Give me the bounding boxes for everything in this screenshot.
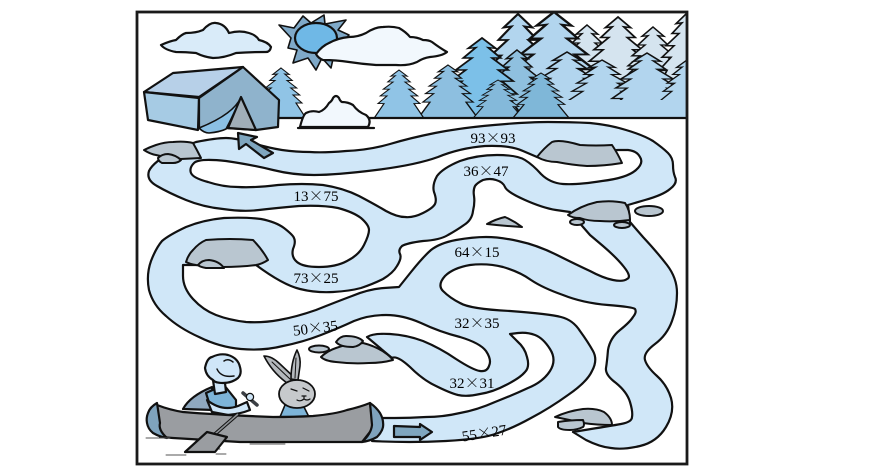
rock: left river bend (186, 239, 268, 268)
front row of darker trees (256, 38, 569, 118)
label: 73x25: 73×25 (293, 267, 339, 288)
frame (137, 12, 687, 464)
cloud: on the ground (298, 96, 374, 128)
middle row of light blue trees (494, 13, 686, 117)
rock: end of lower river branch (309, 336, 393, 363)
turtle eye (224, 360, 233, 362)
paddle (185, 393, 257, 452)
sun rays (279, 15, 349, 70)
turtle shirt (206, 385, 236, 412)
label: 36x47: 36×47 (463, 160, 509, 181)
rabbit shirt (280, 405, 309, 417)
island: middle white land (183, 179, 629, 322)
label: 32x31: 32×31 (449, 372, 495, 393)
label: 32x35: 32×35 (454, 312, 500, 333)
river (148, 122, 677, 449)
tent front wall (199, 67, 279, 130)
cloud: in front of sun (316, 27, 447, 65)
forest of pine trees (266, 13, 686, 117)
arrow: toward tent (238, 133, 273, 158)
paddle handle and hand (243, 393, 257, 405)
rabbit left ear (264, 356, 297, 383)
turtle shell (183, 387, 214, 410)
canoe with riders (146, 350, 383, 455)
tent roof (144, 67, 243, 97)
turtle neck (213, 380, 226, 394)
canoe hull (157, 403, 373, 442)
back row of pale trees (572, 14, 686, 84)
turtle arm (207, 400, 250, 415)
rock: right river fork (568, 201, 663, 228)
rabbit (264, 350, 315, 417)
label: 55x27: 55×27 (460, 419, 509, 446)
label: 13x75: 13×75 (293, 185, 339, 206)
canoe left end (147, 403, 167, 438)
rock: small on middle land (487, 217, 522, 227)
rabbit face (291, 388, 310, 401)
turtle (183, 354, 250, 415)
tent flap (199, 97, 241, 133)
rock: upper river bend (537, 141, 622, 166)
icon: tent (144, 67, 279, 133)
label: 64x15: 64×15 (454, 241, 500, 262)
paddle blade (185, 432, 227, 452)
icon: sun (279, 15, 349, 70)
sun disc (295, 23, 337, 53)
label: 93x93: 93×93 (470, 127, 516, 148)
canoe right end (362, 403, 383, 442)
cloud: upper left (161, 23, 271, 58)
rock: lower right bend (555, 409, 612, 430)
label: 50x35: 50×35 (292, 314, 339, 341)
rabbit head (279, 380, 315, 408)
rabbit inner ear lines (272, 358, 296, 380)
tent door (228, 97, 256, 130)
rock: by tent (144, 142, 201, 163)
rabbit right ear (291, 350, 300, 380)
turtle head (205, 354, 241, 383)
turtle smile (217, 369, 234, 376)
horizon line (270, 117, 686, 119)
arrow: from canoe (394, 424, 432, 440)
island: upper white land (190, 146, 641, 217)
tent side wall (144, 92, 199, 130)
paddle shaft (207, 414, 238, 441)
water ripples (146, 438, 285, 455)
